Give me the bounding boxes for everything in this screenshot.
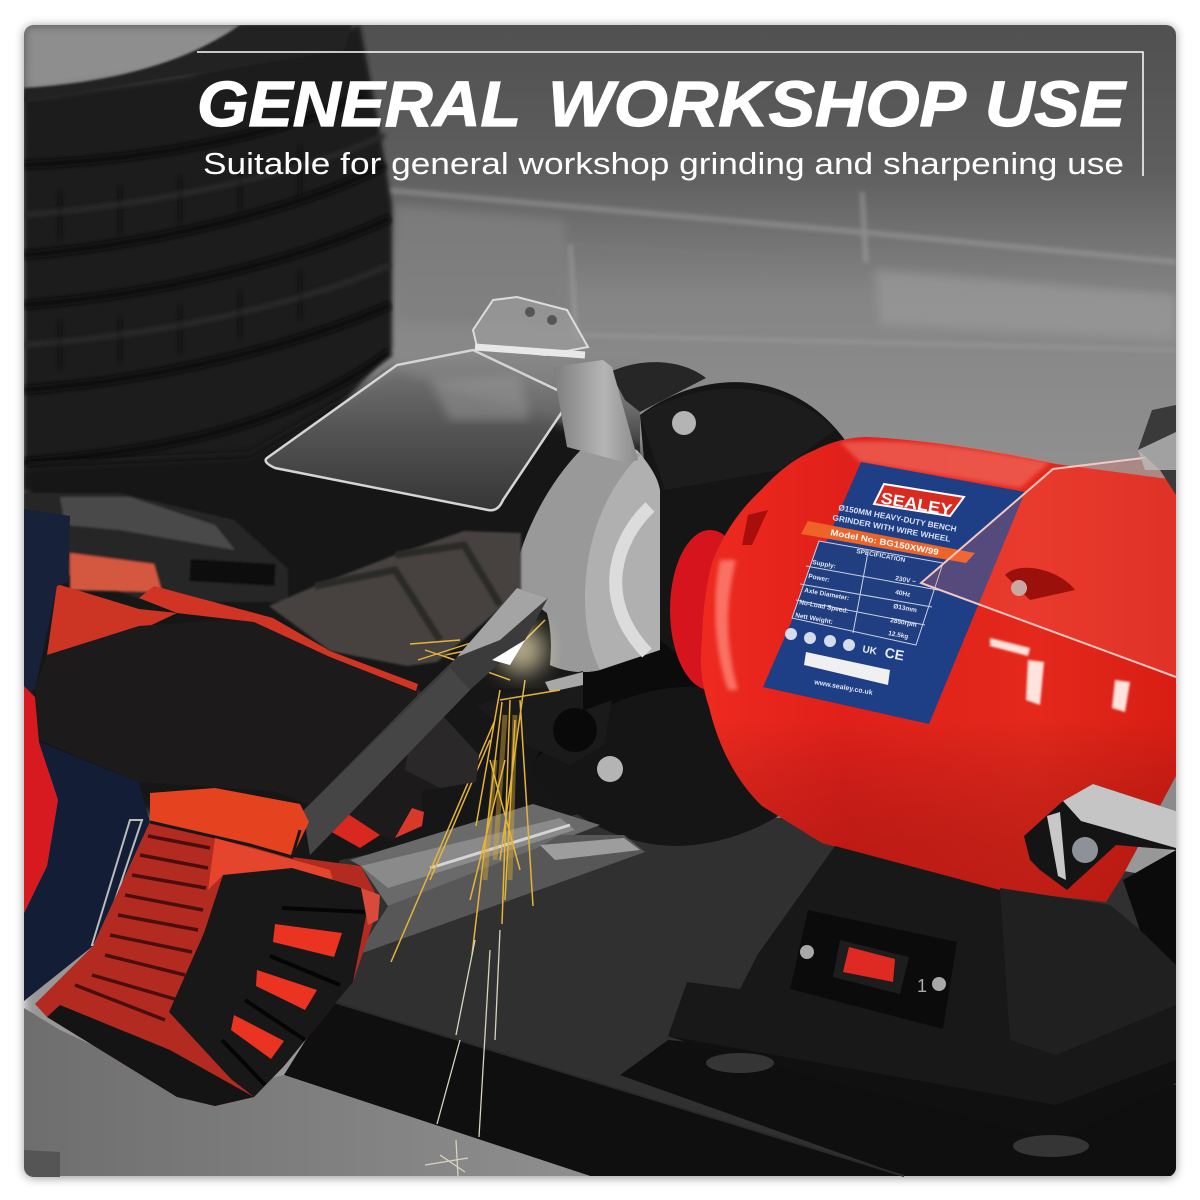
rating label: Ø13mm xyxy=(893,603,918,614)
right wire wheel and tool rest xyxy=(1024,784,1176,965)
steel chisels on bench xyxy=(350,804,645,955)
guard bolts xyxy=(597,411,696,782)
acrylic eye shield xyxy=(266,297,588,510)
grey grinding wheel xyxy=(513,446,660,672)
bench front edge xyxy=(284,1001,904,1176)
rating label: No-Load Speed: xyxy=(799,599,849,615)
rating label: 40Hz xyxy=(895,589,912,599)
title frame xyxy=(197,52,1143,176)
rating label: SPECIFICATION xyxy=(856,548,906,564)
rating label: www.sealey.co.uk xyxy=(813,679,873,697)
sleeve logo xyxy=(92,820,142,945)
rating label: Nett Weight: xyxy=(795,612,833,626)
background forearm sleeve xyxy=(269,531,521,666)
rating label: Model No: BG150XW/99 xyxy=(830,527,940,557)
rating label: 230V ~ xyxy=(895,575,917,586)
rating label: GRINDER WITH WIRE WHEEL xyxy=(832,513,951,544)
sparks xyxy=(391,620,560,1176)
bench surface xyxy=(280,810,1176,1176)
car tyre stack xyxy=(24,25,392,490)
rating label: 12.5kg xyxy=(888,630,909,641)
sleeve fold xyxy=(315,545,500,640)
rating label: 2850rpm xyxy=(890,617,917,629)
rating label: CE xyxy=(883,644,905,663)
black wheel guard xyxy=(578,382,844,846)
on/off switch: 1 xyxy=(917,976,927,996)
rating label: Supply: xyxy=(812,559,836,570)
sparks over sleeve xyxy=(410,639,470,661)
navy sleeve upper xyxy=(24,509,70,693)
spark glow xyxy=(498,626,546,674)
rating label: Axle Diameter: xyxy=(804,587,850,602)
upper glove xyxy=(35,584,479,848)
rating label: Ø150MM HEAVY-DUTY BENCH xyxy=(838,503,957,534)
rating label: Power: xyxy=(808,573,830,584)
on/off switch xyxy=(790,910,957,1029)
subtitle: Suitable for general workshop grinding and sharpening use xyxy=(203,146,1124,181)
rating label xyxy=(763,462,1025,724)
lower glove xyxy=(35,788,380,1106)
dark background beneath tyres xyxy=(24,370,640,900)
rating label: SEALEY xyxy=(879,490,954,520)
title xyxy=(197,68,1127,140)
metal shield bracket xyxy=(553,360,638,463)
second acrylic shield over motor xyxy=(921,405,1176,677)
navy sleeve lower xyxy=(24,742,150,1001)
title: USE xyxy=(985,68,1127,140)
red motor body xyxy=(701,437,1176,902)
adjustment knob xyxy=(553,708,597,752)
power tool in background xyxy=(24,493,288,602)
title: GENERAL xyxy=(197,68,521,140)
chisel being sharpened xyxy=(303,588,548,855)
rating label: UK xyxy=(861,644,878,658)
bench shadow under grinder xyxy=(620,1040,1176,1176)
red motor hub xyxy=(670,530,725,689)
tool rest xyxy=(540,671,612,752)
motor end cylinder xyxy=(610,362,706,412)
title: WORKSHOP xyxy=(548,68,966,140)
iron base xyxy=(668,846,1176,1157)
red jacket cuff xyxy=(24,686,58,913)
wall xyxy=(24,25,1176,825)
lower cabinet xyxy=(24,1008,590,1176)
